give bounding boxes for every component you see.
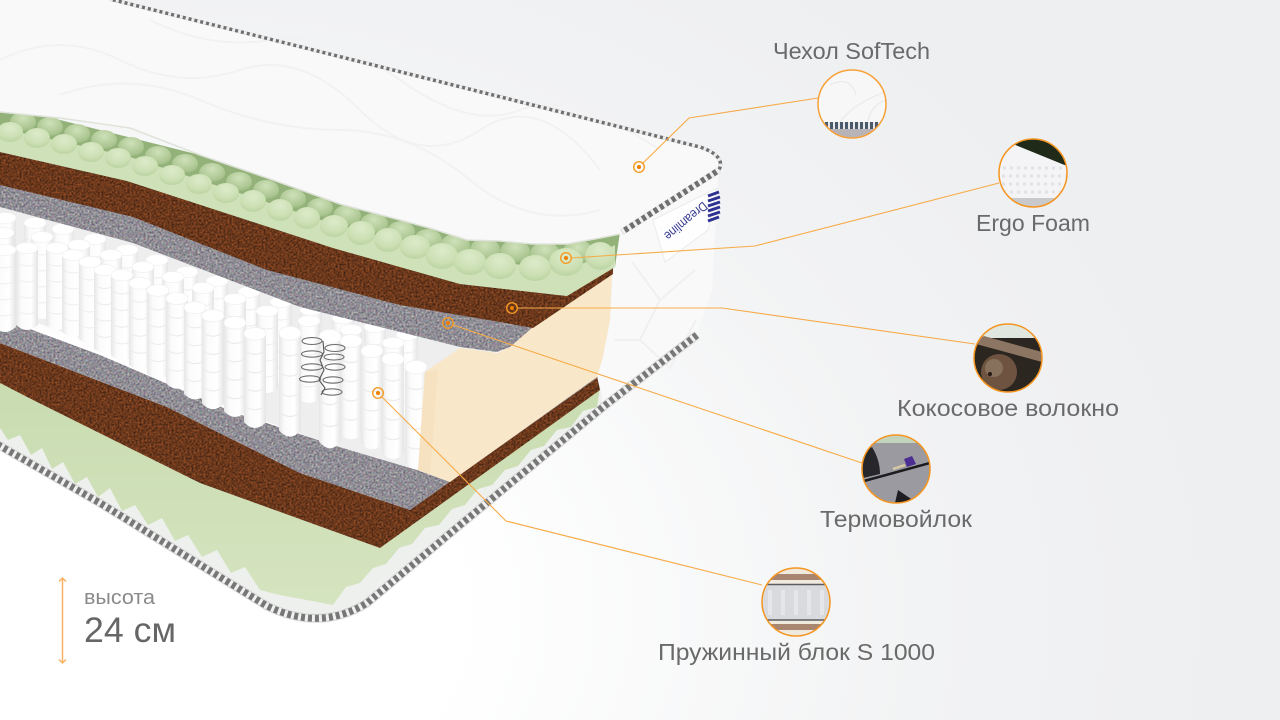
leader lines — [382, 98, 999, 585]
label: coconut fibre: Кокосовое волокно — [897, 395, 1119, 421]
back rows of springs — [0, 212, 418, 425]
lower coconut fibre layer — [0, 343, 600, 548]
label: spring block: Пружинный блок S 1000 — [658, 639, 935, 665]
front row of springs — [0, 242, 427, 469]
bottom fabric strip — [0, 385, 603, 618]
height label — [84, 587, 176, 650]
mattress cutaway — [0, 0, 722, 618]
thumbnail: Ergo Foam — [999, 139, 1067, 208]
side wall fabric — [600, 176, 718, 405]
brand label — [653, 188, 720, 262]
thumbnail: SofTech cover — [818, 70, 886, 139]
exposed spring coil — [300, 338, 345, 395]
height label: 24 см — [84, 611, 176, 650]
thumbnail: spring block — [762, 568, 830, 636]
top piping cord — [110, 0, 720, 232]
thumbnail: coconut fibre — [974, 324, 1042, 392]
thumbnail: thermal felt — [862, 435, 930, 503]
brand logo stripes — [708, 192, 720, 221]
label: thermal felt: Термовойлок — [820, 506, 973, 532]
bottom piping cord — [0, 335, 697, 618]
label: Ergo Foam: Ergo Foam — [976, 210, 1090, 236]
upper felt layer — [0, 183, 536, 352]
upper green Ergo Foam layer — [0, 105, 620, 296]
markers on layers — [373, 162, 644, 398]
quilted top cover — [0, 0, 722, 244]
latex foam core — [418, 274, 612, 482]
pocket spring block — [0, 207, 497, 470]
brand label: Dreamline — [661, 199, 711, 244]
height arrow — [59, 578, 66, 663]
lower felt layer — [0, 318, 597, 510]
lower green foam layer — [0, 383, 600, 605]
label: cover: Чехол SofTech — [773, 38, 930, 64]
height label: высота — [84, 587, 156, 609]
back row of foam bumps — [10, 112, 593, 266]
front row of foam bumps — [0, 122, 615, 281]
upper coconut fibre layer — [0, 150, 613, 328]
